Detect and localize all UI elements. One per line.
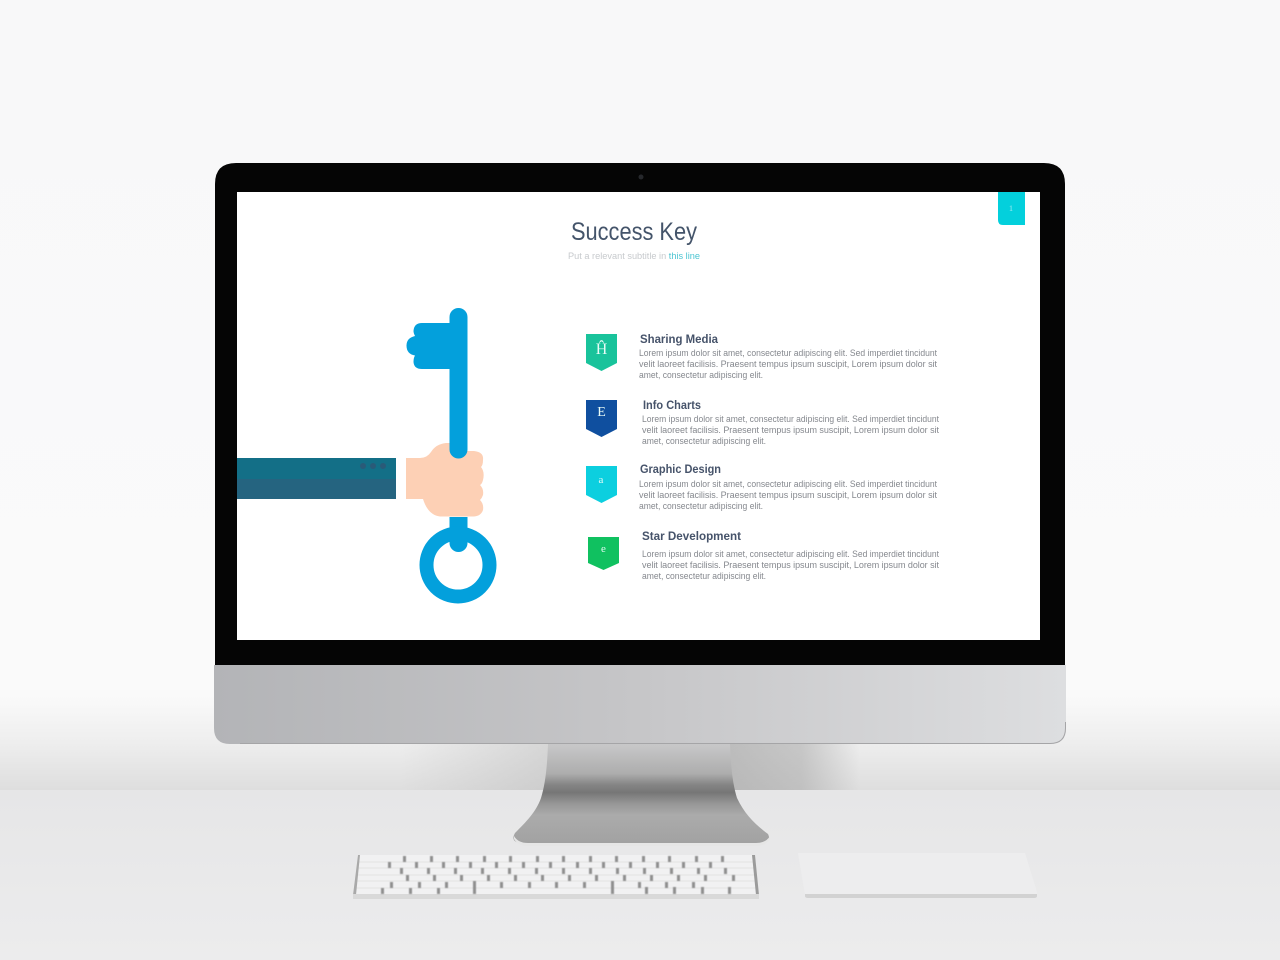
background: desk: [0, 790, 1280, 960]
badge: [586, 400, 617, 437]
body text: velit laoreet facilisis. Praesent tempus ipsum suscipit, Lorem ipsum dolor sit: [639, 490, 937, 500]
badge: a: [599, 474, 604, 486]
monitor chin edge: [240, 722, 1066, 744]
hand: [406, 443, 484, 516]
body text: amet, consectetur adipiscing elit.: [639, 501, 763, 511]
page number tab: [998, 192, 1025, 225]
body text: velit laoreet facilisis. Praesent tempus ipsum suscipit, Lorem ipsum dolor sit: [639, 359, 937, 369]
badge: e: [601, 543, 606, 555]
badge: [588, 537, 619, 570]
item: Graphic Design: [586, 462, 937, 511]
body text: Lorem ipsum dolor sit amet, consectetur adipiscing elit. Sed imperdiet tincidunt: [639, 348, 937, 358]
title: Success Key: [571, 218, 697, 246]
body text: amet, consectetur adipiscing elit.: [642, 571, 766, 581]
heading: Graphic Design: [640, 462, 721, 476]
body text: [642, 549, 939, 581]
badge: Ĥ: [596, 339, 608, 358]
body text: Lorem ipsum dolor sit amet, consectetur adipiscing elit. Sed imperdiet tincidunt: [639, 479, 937, 489]
badge: [586, 466, 617, 503]
body text: amet, consectetur adipiscing elit.: [639, 370, 763, 380]
badge: [586, 334, 617, 371]
sleeve: [237, 458, 396, 499]
slide screen: [237, 192, 1040, 640]
wall shadow right of stand: [730, 744, 860, 790]
heading: Info Charts: [643, 398, 701, 412]
heading: Star Development: [642, 529, 741, 543]
monitor: [214, 163, 1066, 744]
body text: velit laoreet facilisis. Praesent tempus ipsum suscipit, Lorem ipsum dolor sit: [642, 560, 939, 570]
item: Info Charts: [586, 398, 939, 446]
heading: Sharing Media: [640, 332, 718, 346]
body text: Lorem ipsum dolor sit amet, consectetur adipiscing elit. Sed imperdiet tincidunt: [642, 414, 939, 424]
item: Sharing Media: [586, 332, 937, 380]
monitor stand: [513, 744, 770, 846]
body text: velit laoreet facilisis. Praesent tempus ipsum suscipit, Lorem ipsum dolor sit: [642, 425, 939, 435]
page number tab: 1: [1009, 204, 1013, 213]
trackpad: [798, 853, 1037, 898]
body text: amet, consectetur adipiscing elit.: [642, 436, 766, 446]
subtitle: Put a relevant subtitle in this line: [568, 251, 700, 262]
body text: Lorem ipsum dolor sit amet, consectetur adipiscing elit. Sed imperdiet tincidunt: [642, 549, 939, 559]
monitor bezel: [215, 163, 1065, 665]
badge: E: [597, 405, 606, 420]
key: [406, 308, 490, 596]
body text: [639, 348, 937, 380]
webcam: [638, 174, 644, 180]
illustration: hand holding key: [237, 308, 490, 596]
body text: [642, 414, 939, 446]
keyboard: [353, 855, 759, 899]
item: Star Development: [588, 529, 939, 581]
monitor chin: [214, 665, 1066, 744]
body text: [639, 479, 937, 511]
wall shadow left of stand: [400, 744, 548, 790]
